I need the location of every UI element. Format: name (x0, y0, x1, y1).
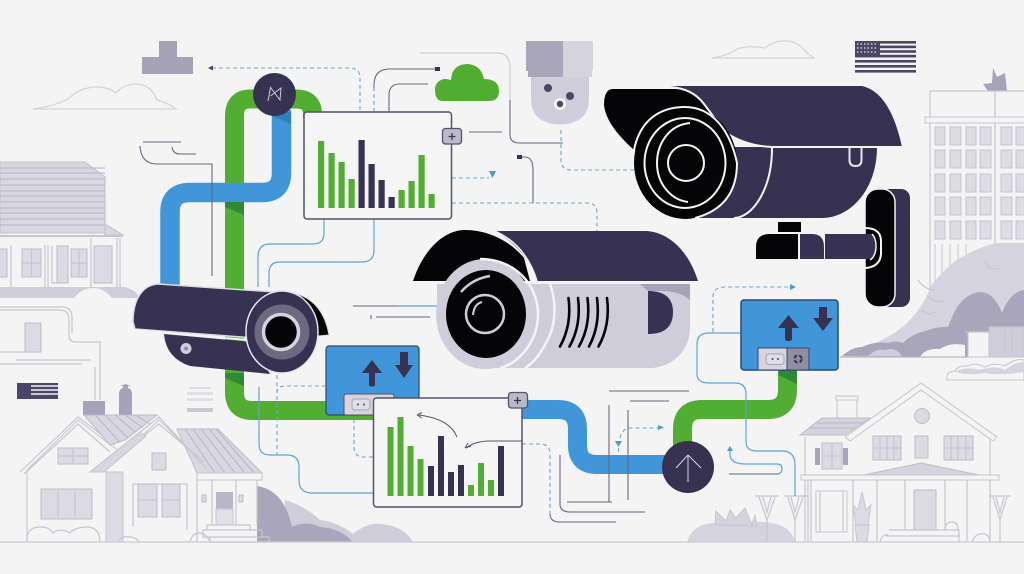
lines below left camera (259, 387, 373, 493)
bars (388, 417, 504, 496)
left upper house (0, 162, 140, 298)
body (690, 147, 877, 218)
green pipe left (234, 99, 380, 410)
socket panel (344, 394, 394, 415)
icon: up arrow (778, 315, 799, 341)
right lower house (687, 383, 1011, 542)
small house (968, 332, 1024, 357)
blue control box right (741, 300, 838, 370)
plus button (508, 392, 528, 408)
shrubs behind (285, 500, 413, 542)
lower body (164, 334, 270, 374)
visor (282, 291, 329, 336)
blue control box left (326, 346, 419, 415)
socket panel (758, 348, 809, 370)
vents (560, 298, 608, 346)
icon: flag top right (855, 41, 916, 73)
steps (203, 525, 269, 542)
front discs (246, 291, 318, 373)
bush outline (947, 360, 1024, 380)
icon: cloud outline right (712, 41, 814, 58)
visor (413, 230, 530, 281)
dashed top arrow (212, 68, 360, 112)
house B (106, 420, 197, 542)
panel: bar chart bottom (374, 392, 528, 507)
blue pipe left (170, 110, 282, 300)
porch (864, 463, 979, 475)
visor black (604, 89, 712, 150)
icon: rooftop plant (983, 68, 1007, 91)
icon: down arrow (813, 307, 833, 331)
hood (669, 86, 902, 147)
house A (27, 420, 124, 542)
icon: grey block top left (142, 41, 193, 74)
camera wall mount (756, 189, 910, 307)
lower left houses (20, 415, 413, 542)
trellis posts (755, 496, 779, 542)
large camera top right (604, 86, 902, 219)
icon: green cloud (435, 64, 499, 101)
dome camera (526, 41, 593, 124)
plus button (442, 128, 462, 144)
body (437, 284, 690, 368)
roof (0, 162, 105, 233)
curved arrows (419, 415, 457, 437)
gray left (140, 142, 212, 276)
front disc (436, 259, 534, 369)
left lower line work (0, 307, 100, 400)
chimney and gas tank (83, 384, 132, 415)
blue line across green pipe (697, 333, 795, 496)
side window with shutters (822, 443, 842, 469)
white hood gap (537, 281, 698, 283)
lines near center camera (353, 306, 430, 319)
shrub with leaves (687, 521, 795, 542)
node circle bottom (662, 441, 714, 493)
chimney (837, 400, 857, 418)
icon: up arrow (362, 360, 382, 386)
roof left (800, 418, 870, 435)
porch (197, 473, 262, 480)
building top right (925, 68, 1024, 290)
lines right of chart 2 (522, 444, 550, 514)
panel: bar chart top (304, 112, 462, 219)
ground mound (0, 287, 140, 298)
ground line (0, 541, 1024, 543)
icon: cloud outline left (33, 84, 176, 109)
drip loop (850, 148, 862, 166)
walls (805, 437, 990, 542)
gable (845, 383, 997, 441)
windows (935, 127, 1024, 239)
icon: down arrow (395, 352, 413, 378)
steps (886, 530, 960, 542)
pipe shadows (225, 112, 797, 386)
lens (634, 107, 737, 219)
blue pipe lower (518, 410, 672, 464)
node circle top (253, 73, 296, 116)
green pipe right (682, 365, 788, 450)
body arcs (734, 148, 772, 218)
hillside and small house right (840, 243, 1024, 380)
icon: flag left (17, 383, 58, 399)
bars (318, 140, 435, 208)
blue lines below chart (258, 219, 324, 287)
lens (446, 270, 526, 358)
walls and windows (11, 238, 120, 287)
potted plant (853, 492, 871, 525)
upper body (133, 284, 290, 338)
left camera (133, 284, 329, 374)
hood (495, 231, 698, 281)
icon: small beacon stack (187, 387, 213, 412)
center camera (413, 230, 698, 369)
return arrow (730, 450, 782, 474)
status dot (180, 343, 192, 354)
connector lines (140, 53, 796, 522)
